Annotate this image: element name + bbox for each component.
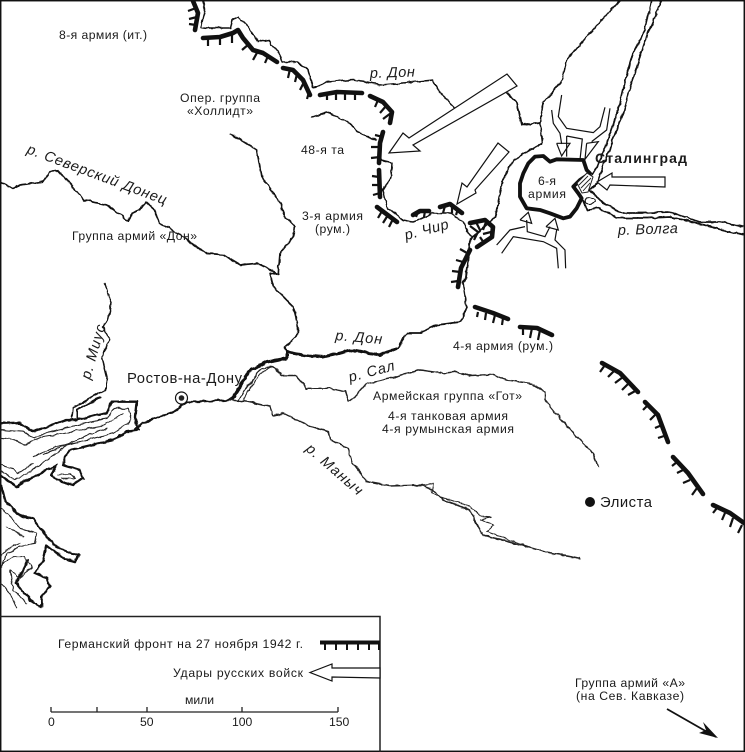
label: Army Group Don: Группа армий «Дон» — [72, 229, 197, 243]
legend: Soviet strikes: Удары русских войск — [173, 666, 304, 680]
legend: German front: Германский фронт на 27 ноября 1942 г. — [58, 637, 303, 651]
river: Manych — [230, 400, 580, 558]
arrow: eastern Soviet strike — [597, 173, 665, 190]
label: 48th panzer: 48-я та — [301, 143, 344, 157]
label: Volga river: р. Волга — [617, 221, 678, 239]
arrow: large Soviet strike — [389, 74, 517, 153]
German front line segments — [188, 1, 744, 533]
legend: scale bar: 50 — [140, 715, 154, 729]
label: 3rd Army: (рум.) — [315, 222, 350, 236]
legend: scale bar: мили — [185, 693, 214, 707]
label: Army Group Hoth: Армейская группа «Гот» — [373, 389, 522, 403]
label: Hollidt group: «Холлидт» — [187, 104, 253, 118]
6th Army encirclement — [520, 156, 590, 218]
label: Chir river: р. Чир — [402, 217, 451, 244]
label: Don river upper: р. Дон — [369, 64, 415, 82]
sea of Azov coastline — [0, 402, 138, 608]
label: 4th Romanian Army: 4-я армия (рум.) — [453, 339, 553, 353]
river: Severny Donets and tributary — [0, 133, 298, 353]
legend: scale bar: 150 — [329, 715, 350, 729]
label: 3rd Army — [302, 209, 363, 236]
label: 3rd Army: 3-я армия — [302, 209, 363, 223]
river: Sal — [238, 367, 598, 467]
label: Sal river: р. Сал — [346, 358, 396, 386]
river: Chir and tributary — [312, 112, 472, 238]
label: Hollidt group: Опер. группа — [180, 91, 260, 105]
label: Don river lower: р. Дон — [334, 328, 383, 348]
river: Don — [135, 0, 542, 429]
label: Armies in Group Hoth — [382, 409, 514, 436]
legend: Soviet strikes — [173, 664, 380, 681]
label: Armies in Group Hoth: 4-я танковая армия — [388, 409, 508, 423]
Elista marker and label: Элиста — [600, 495, 653, 511]
label: Manych river: р. Маныч — [302, 440, 366, 499]
arrows: southern Soviet strikes — [497, 212, 566, 268]
river: Mius — [72, 284, 111, 419]
label: Mius river: р. Миус — [78, 322, 109, 382]
legend: scale bar: 0 — [48, 715, 55, 729]
arrow: second Soviet strike — [457, 143, 509, 204]
label: 6th Army: 6-я — [538, 174, 556, 188]
label: 6th Army — [528, 174, 566, 201]
label: Army Group A — [575, 676, 685, 703]
panel: legend — [0, 616, 380, 752]
label: Rostov-on-Don: Ростов-на-Дону — [127, 371, 243, 387]
legend: scale bar — [48, 693, 350, 729]
label: Hollidt group — [180, 91, 260, 118]
arrow: toward Caucasus — [667, 709, 718, 738]
legend: scale bar: 100 — [232, 715, 253, 729]
Rostov-on-Don city marker — [176, 392, 188, 404]
arrows: northern Soviet strikes — [552, 95, 610, 160]
label: 6th Army: армия — [528, 187, 566, 201]
label: Army Group A: (на Сев. Кавказе) — [576, 689, 684, 703]
label: Army Group A: Группа армий «А» — [575, 676, 685, 690]
label: Armies in Group Hoth: 4-я румынская армия — [382, 422, 514, 436]
Stalingrad hatched city area — [577, 173, 593, 193]
label: Stalingrad: Сталинград — [595, 150, 687, 166]
label: Severny Donets river: р. Северский Донец — [24, 141, 169, 209]
river: Volga — [540, 0, 745, 235]
label: 8th Army: 8-я армия (ит.) — [59, 28, 147, 42]
